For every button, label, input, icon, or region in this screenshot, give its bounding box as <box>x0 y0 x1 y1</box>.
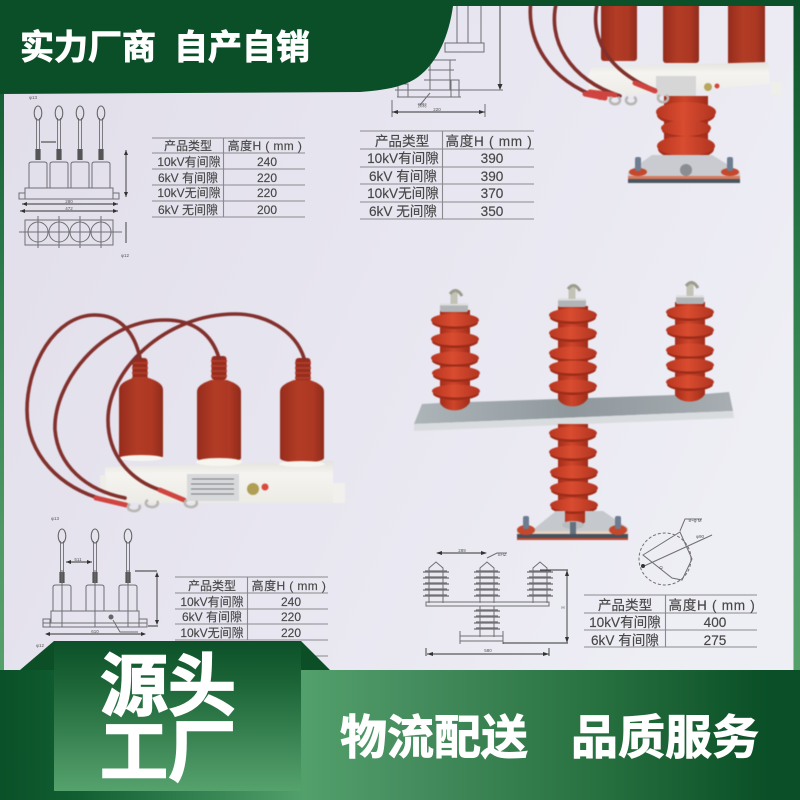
drawing: four-phase arrester dimensions: 472 <box>65 206 73 211</box>
drawing: three-phase arrester dimensions <box>36 516 159 648</box>
table: four-phase heights: 220 <box>257 186 277 200</box>
table: four-phase heights: 高度H ( mm ) <box>228 138 302 153</box>
table: three-phase heights: 10kV有间隙 <box>180 595 244 609</box>
table: three-phase heights: 220 <box>281 626 301 640</box>
bottom band <box>0 670 800 800</box>
badge text line 1: 源头 <box>100 649 236 725</box>
drawing: T-frame arrester dimensions <box>423 548 569 656</box>
drawing: T-frame arrester dimensions: 289 <box>458 548 466 553</box>
header banner <box>0 0 453 94</box>
table: top centre heights: 高度H ( mm ) <box>445 133 533 149</box>
heading: own production and sales: 自产自销 <box>174 29 310 67</box>
drawing: three-phase arrester dimensions: 511 <box>74 557 82 562</box>
table: T-frame heights: 400 <box>704 615 727 630</box>
product photo: three-phase arrester with cables <box>27 314 345 511</box>
table: top centre heights: 370 <box>481 186 504 201</box>
table: T-frame heights: 6kV 有间隙 <box>591 633 659 648</box>
top frame strip <box>0 0 800 6</box>
badge text line 2: 工厂 <box>100 715 236 791</box>
mounting plate <box>517 511 628 540</box>
table: top centre heights: 产品类型 <box>375 134 429 149</box>
table: four-phase heights: 10kV有间隙 <box>157 155 221 169</box>
cables <box>530 0 668 104</box>
table: top centre heights: 390 <box>481 169 504 184</box>
white base unit <box>588 62 782 98</box>
white base unit <box>100 461 345 503</box>
drawing: top centre insulator dimensions: 预制 <box>418 102 427 109</box>
drawing: T-frame arrester dimensions: H <box>561 605 565 610</box>
drawing: top centre insulator dimensions: 220 <box>433 107 441 112</box>
table: three-phase heights: 高度H ( mm ) <box>252 578 326 593</box>
table: top centre heights: 390 <box>481 151 504 166</box>
table: T-frame heights: 10kV有间隙 <box>589 615 661 630</box>
three red surge cylinders <box>601 0 765 66</box>
steel crossbar <box>414 392 734 431</box>
table: top centre heights: 6kV 有间隙 <box>369 169 437 184</box>
table: top centre heights: 10kV无间隙 <box>367 186 439 201</box>
table: four-phase heights <box>152 138 305 217</box>
table: top centre heights <box>360 131 534 219</box>
slogan: quality service: 品质服务 <box>571 711 759 764</box>
drawing: four-phase arrester dimensions <box>19 95 129 258</box>
drawing: triangular mounting plate plan: Ω <box>659 565 663 570</box>
table: top centre heights: 10kV有间隙 <box>367 151 439 166</box>
side frame: right <box>794 0 800 680</box>
table: four-phase heights: 240 <box>257 155 277 169</box>
table: three-phase heights: 产品类型 <box>188 579 236 593</box>
product photo: arrester on insulator, top right <box>530 0 782 183</box>
table: three-phase heights: 6kV 有间隙 <box>182 610 242 624</box>
slogan: logistics delivery: 物流配送 <box>340 711 528 764</box>
table: four-phase heights: 6kV 无间隙 <box>158 203 218 217</box>
table: four-phase heights: 10kV无间隙 <box>157 186 221 200</box>
side frame: left <box>0 0 4 680</box>
drawing: T-frame arrester dimensions: 580 <box>484 648 492 653</box>
table: three-phase heights: 220 <box>281 610 301 624</box>
drawing: T-frame arrester dimensions: SHZ <box>498 552 507 557</box>
mounting plate <box>628 155 740 183</box>
table: four-phase heights: 220 <box>257 171 277 185</box>
badge right fold <box>301 641 330 670</box>
lower insulator <box>549 424 598 524</box>
table: T-frame heights: 275 <box>704 633 726 648</box>
drawing: top centre insulator dimensions <box>392 0 503 117</box>
drawing: three-phase arrester dimensions: 610 <box>91 629 99 634</box>
upper insulators <box>431 282 714 412</box>
table: four-phase heights: 产品类型 <box>164 139 212 153</box>
table: top centre heights: 6kV 无间隙 <box>369 204 437 219</box>
table: T-frame heights: 产品类型 <box>598 598 652 613</box>
three cylinders <box>119 356 325 467</box>
badge panel <box>54 641 301 791</box>
cables and terminal lugs <box>27 314 304 511</box>
drawing: four-phase arrester dimensions: φ13 <box>29 95 37 100</box>
table: three-phase heights: 240 <box>281 595 301 609</box>
table: four-phase heights: 200 <box>257 203 277 217</box>
drawing: three-phase arrester dimensions: φ12 <box>36 643 44 648</box>
drawing: four-phase arrester dimensions: 280 <box>65 199 73 204</box>
table: T-frame heights <box>584 595 757 648</box>
drawing: triangular mounting plate plan: φ90 <box>696 534 704 539</box>
drawing: three-phase arrester dimensions: φ13 <box>51 516 59 521</box>
badge left fold <box>20 641 54 670</box>
product photo: T-frame arrester, centre right <box>414 282 734 540</box>
table: top centre heights: 350 <box>481 204 504 219</box>
drawing: triangular mounting plate plan <box>639 518 712 585</box>
heading: strength manufacturer: 实力厂商 <box>20 29 156 67</box>
table: three-phase heights <box>175 577 328 656</box>
table: four-phase heights: 6kV 有间隙 <box>158 171 218 185</box>
table: T-frame heights: 高度H ( mm ) <box>668 597 756 613</box>
drawing: triangular mounting plate plan: 8~φ M <box>688 518 702 523</box>
table: three-phase heights: 10kV无间隙 <box>180 626 244 640</box>
drawing: four-phase arrester dimensions: φ12 <box>121 253 129 258</box>
lower insulator <box>656 96 716 166</box>
